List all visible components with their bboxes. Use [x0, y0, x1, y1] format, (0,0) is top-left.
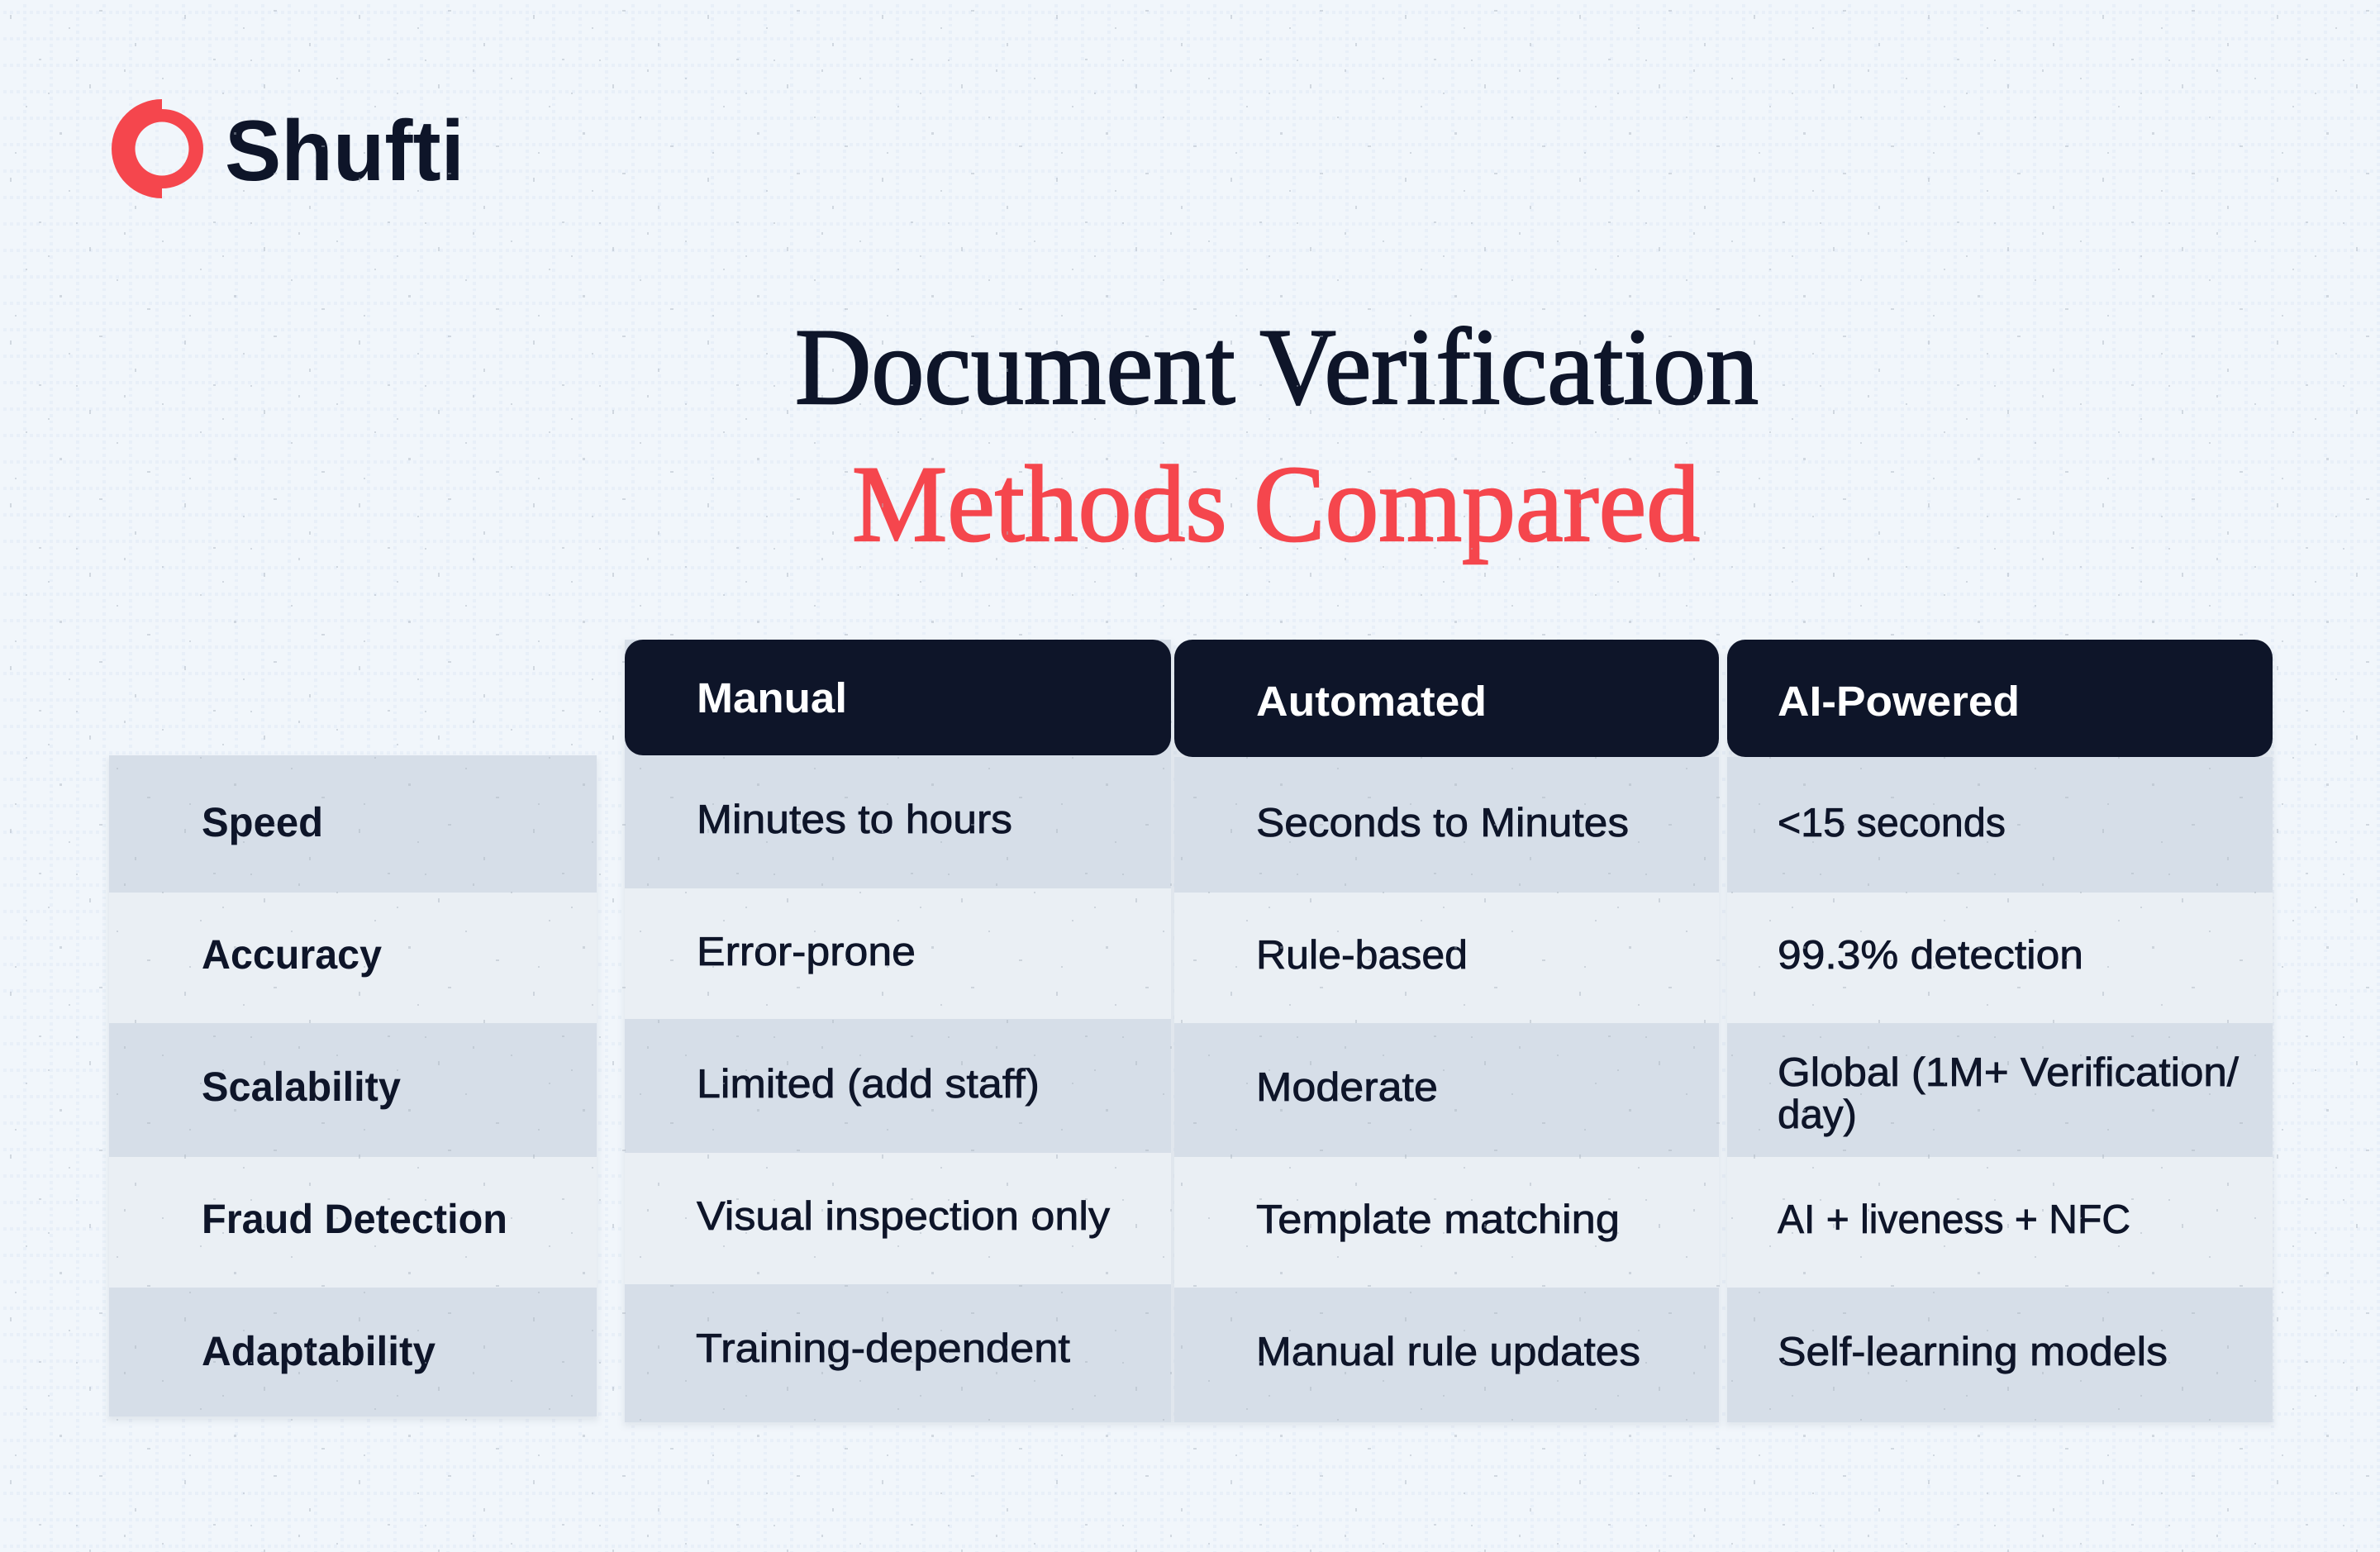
- header: AI-Powered: AI-Powered: [1778, 678, 2020, 725]
- row label: Scalability: Scalability: [202, 1064, 401, 1110]
- row label: Scalability: [109, 1023, 597, 1157]
- column: criteria: [109, 755, 597, 1416]
- cell: Template matching: [1174, 1157, 1719, 1288]
- cell: Global (1M+ Verification/day): Global (1M+ Verification/: [1778, 1050, 2239, 1095]
- cell: AI + liveness + NFC: AI + liveness + NFC: [1778, 1197, 2130, 1242]
- cell: Seconds to Minutes: Seconds to Minutes: [1256, 801, 1629, 845]
- cell: Self-learning models: [1727, 1288, 2273, 1422]
- cell: Visual inspection only: [625, 1153, 1171, 1284]
- cell: Training-dependent: [625, 1284, 1171, 1422]
- cell: Moderate: Moderate: [1256, 1065, 1438, 1110]
- cell: Rule-based: [1174, 893, 1719, 1023]
- cell: Minutes to hours: Minutes to hours: [697, 797, 1012, 842]
- cell: Manual rule updates: [1174, 1288, 1719, 1422]
- cell: Error-prone: Error-prone: [697, 930, 916, 974]
- cell: under 15 seconds: <15 seconds: [1778, 801, 2006, 845]
- cell: Template matching: Template matching: [1256, 1197, 1620, 1242]
- row label: Adaptability: [109, 1288, 597, 1416]
- cell: Visual inspection only: Visual inspection only: [697, 1194, 1111, 1239]
- row label: Accuracy: Accuracy: [202, 931, 382, 978]
- column: Manual: [625, 640, 1171, 1422]
- column: Automated: [1174, 640, 1719, 1422]
- cell: Global (1M+ Verification/day): [1727, 1023, 2273, 1157]
- cell: Self-learning models: Self-learning models: [1778, 1330, 2168, 1374]
- cell: under 15 seconds: [1727, 757, 2273, 893]
- row label: Accuracy: [109, 893, 597, 1023]
- header: Automated: [1174, 640, 1719, 757]
- comparison table: [109, 640, 2273, 1422]
- row label: Adaptability: Adaptability: [202, 1328, 436, 1374]
- cell: AI + liveness + NFC: [1727, 1157, 2273, 1288]
- icon: red ring logo mark: [112, 99, 203, 198]
- header: Automated: Automated: [1256, 678, 1487, 725]
- cell: Limited (add staff): Limited (add staff): [697, 1062, 1040, 1107]
- row label: Fraud Detection: [109, 1157, 597, 1288]
- wordmark: Shufti: [225, 103, 464, 199]
- cell: Training-dependent: Training-dependent: [696, 1326, 1070, 1371]
- row label: Fraud Detection: Fraud Detection: [202, 1196, 507, 1242]
- cell: Error-prone: [625, 888, 1171, 1019]
- title line 1: Document Verification: [795, 306, 1759, 427]
- header: Manual: Manual: [697, 674, 847, 721]
- row label: Speed: Speed: [202, 799, 323, 845]
- cell: Rule-based: Rule-based: [1256, 933, 1468, 978]
- cell: Minutes to hours: [625, 755, 1171, 888]
- cell: 99.3% detection: 99.3% detection: [1778, 933, 2083, 978]
- logo: Shufti: [112, 99, 464, 199]
- header: Manual: [625, 640, 1171, 755]
- title line 2: Methods Compared: [852, 443, 1700, 564]
- cell: Manual rule updates: Manual rule updates: [1256, 1330, 1640, 1374]
- row label: Speed: [109, 755, 597, 893]
- cell: Limited (add staff): [625, 1019, 1171, 1153]
- cell: Moderate: [1174, 1023, 1719, 1157]
- cell: Global (1M+ Verification/day): day): [1778, 1093, 1857, 1137]
- column: AI-Powered: [1727, 640, 2273, 1422]
- cell: Seconds to Minutes: [1174, 757, 1719, 893]
- header: AI-Powered: [1727, 640, 2273, 757]
- cell: 99.3% detection: [1727, 893, 2273, 1023]
- title: [795, 306, 1759, 564]
